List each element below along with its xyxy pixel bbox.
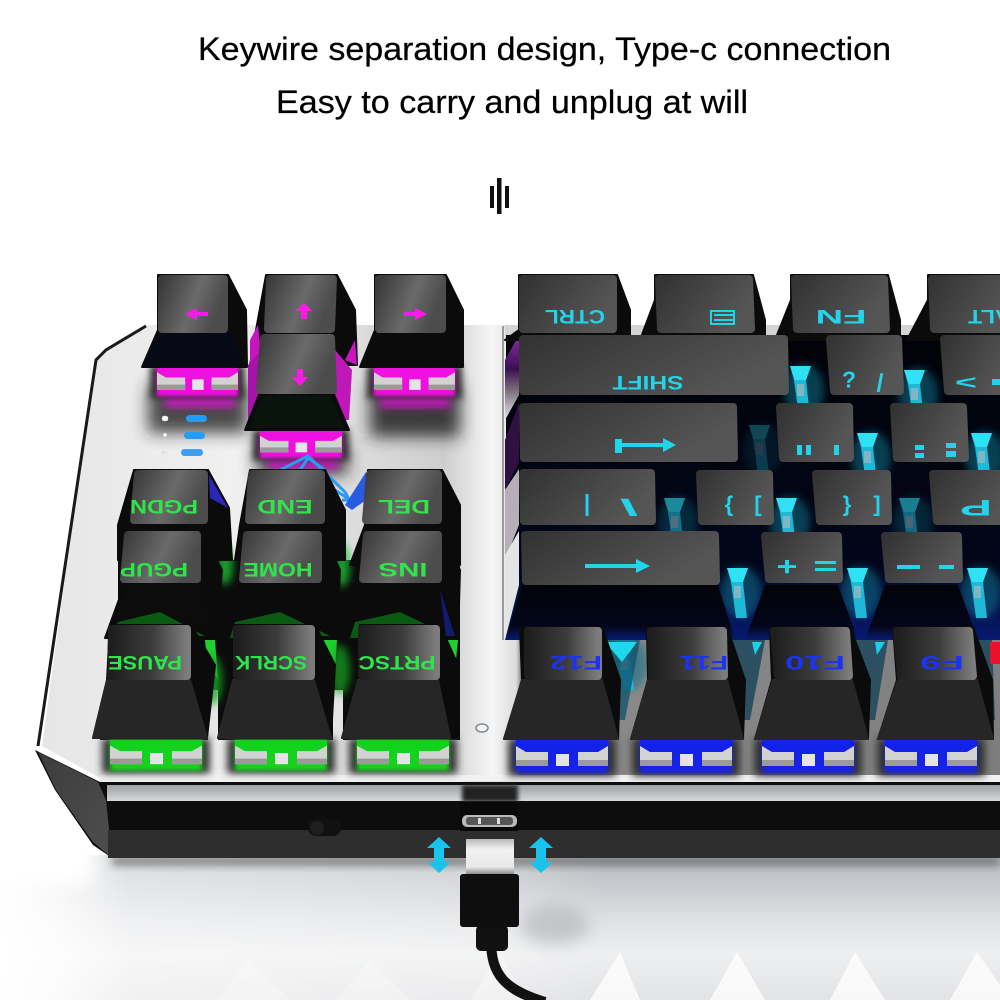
- key: HOME: [226, 531, 340, 638]
- key: brackets open: [700, 474, 770, 521]
- key: F9: [877, 627, 993, 776]
- icon: audio bars divider: [490, 178, 509, 214]
- title: keywire separation heading: Keywire separation design, Type-c connection: [198, 31, 891, 67]
- key: menu: [640, 275, 765, 340]
- key: SCRLK: [218, 625, 335, 773]
- key: right arrow: [360, 275, 463, 399]
- key: PGUP: [105, 531, 222, 638]
- key: down arrow: [245, 338, 352, 461]
- key: brackets open: ]: [754, 495, 762, 520]
- key: brackets close: {: [842, 495, 851, 520]
- key: question slash: [830, 339, 900, 396]
- key: PAUSE: PAUSE: [108, 651, 182, 672]
- right block lower light gaps: [603, 640, 1000, 720]
- key: PGDN: [118, 470, 232, 560]
- key: FN: FN: [815, 305, 867, 326]
- light reflection wires under down arrow: [280, 456, 352, 505]
- cyan switch glows between keys: [608, 364, 1000, 690]
- keyboard top plate: [38, 325, 1000, 782]
- key: P: P: [960, 495, 992, 520]
- key: F11: [631, 627, 745, 776]
- key: HOME: HOME: [244, 558, 312, 579]
- double arrow: right: [529, 837, 553, 873]
- key: F11: F11: [679, 651, 728, 672]
- key: ALT: [907, 275, 1000, 340]
- key: plus equals: +: [776, 552, 798, 582]
- key: SHIFT: SHIFT: [612, 371, 684, 392]
- key: SHIFT: [523, 339, 785, 392]
- key: plus equals: [745, 536, 858, 640]
- backdrop: right block dark well with glow: [505, 335, 1000, 640]
- title: keywire separation heading: [198, 31, 891, 120]
- double arrow: left: [427, 837, 451, 873]
- indicator pill on plate: [476, 724, 488, 732]
- key: P: [933, 474, 1000, 521]
- status LED indicators: [162, 415, 207, 456]
- key: CTRL: CTRL: [545, 305, 605, 326]
- key: END: [235, 470, 345, 560]
- key: F12: F12: [550, 651, 602, 672]
- key: brackets close: [816, 474, 888, 521]
- floor reflection: [0, 835, 1000, 1000]
- key: DEL: DEL: [377, 495, 430, 516]
- usb-c port: [460, 802, 518, 831]
- icon: tab arrow: [585, 559, 650, 573]
- key: F10: F10: [785, 651, 845, 672]
- icon: menu glyph: [711, 311, 734, 324]
- key: question slash: ¿: [842, 370, 856, 396]
- key: PRTSC: PRTSC: [358, 651, 436, 672]
- key: left arrow: [142, 275, 247, 399]
- key: SCRLK: SCRLK: [235, 651, 307, 672]
- key: DEL: [345, 470, 460, 565]
- key: PAUSE: [93, 625, 215, 773]
- key: brackets open: }: [724, 495, 733, 520]
- key: tab: [505, 535, 735, 640]
- key: F10: [754, 627, 870, 776]
- key: colon semicolon: [894, 407, 965, 458]
- key: backslash pipe: |: [584, 494, 590, 520]
- key: PGDN: PGDN: [130, 495, 198, 516]
- key: greater than: >: [955, 371, 977, 392]
- key: quotes: [780, 407, 850, 458]
- key: question slash: /: [876, 368, 883, 396]
- key: F9: F9: [920, 651, 964, 672]
- key: backslash pipe: [523, 473, 652, 521]
- key: brackets close: [: [873, 495, 881, 520]
- slide switch: [308, 819, 341, 836]
- key: greater than: [944, 339, 1000, 392]
- keyboard front edge: [35, 750, 1000, 858]
- key: PRTSC: [342, 625, 458, 773]
- key: up arrow: [250, 275, 357, 365]
- usb-c cable plug: [460, 839, 545, 1000]
- key: END: END: [258, 495, 312, 516]
- key: FN: [775, 275, 900, 340]
- backdrop: green key block shadow: [100, 543, 460, 740]
- key: CTRL: [505, 275, 630, 340]
- key: enter: [523, 407, 734, 458]
- key: PGUP: PGUP: [120, 558, 188, 579]
- key: INS: [347, 531, 460, 638]
- title: keywire separation heading: Easy to carry and unplug at will: [276, 84, 748, 120]
- key shadows and glow: arrow cluster: [148, 385, 460, 475]
- key: INS: INS: [378, 558, 428, 579]
- key: backslash pipe: \: [618, 494, 638, 520]
- key: minus underscore: [865, 536, 978, 640]
- key: F12: [504, 627, 620, 776]
- icon: enter arrow: [615, 438, 676, 453]
